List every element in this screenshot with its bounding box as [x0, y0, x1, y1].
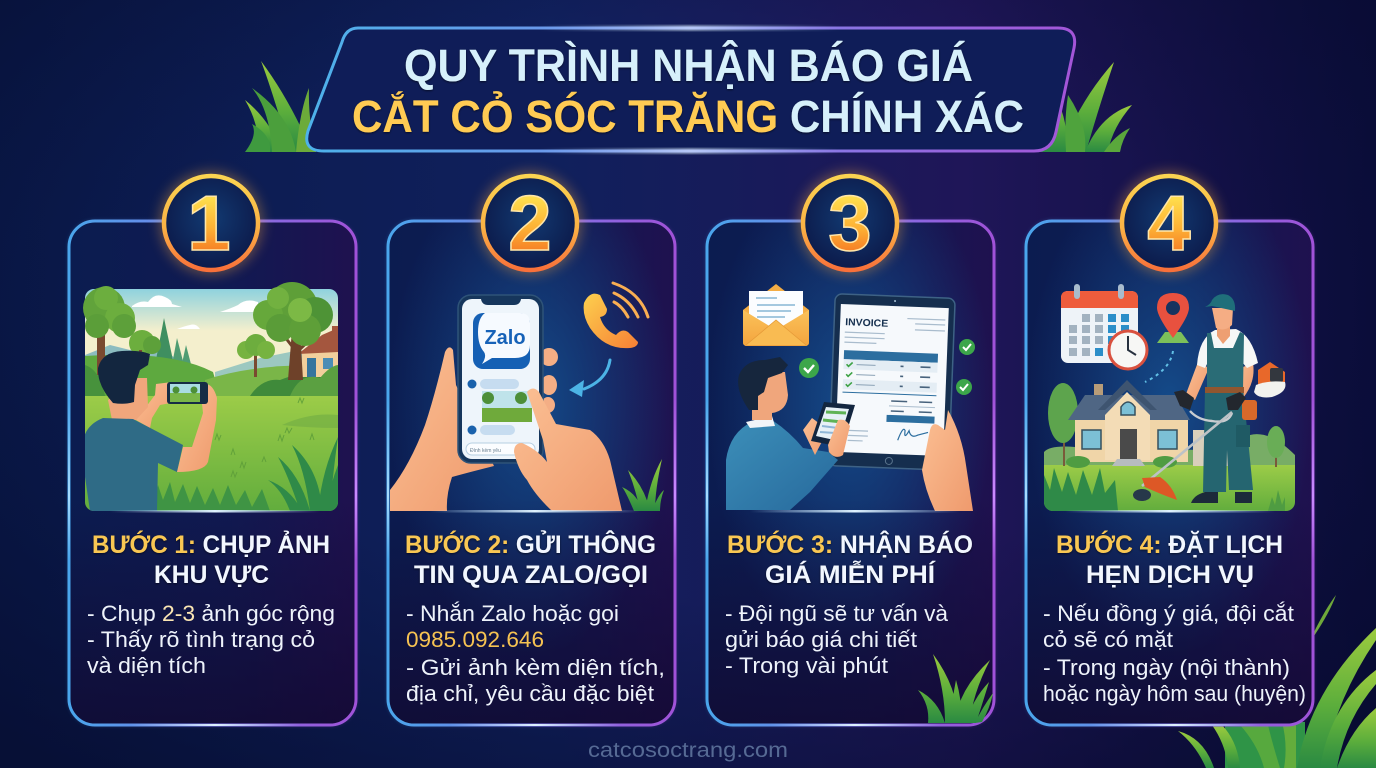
illustration: phone with Zalo [390, 283, 664, 511]
right hand [514, 388, 622, 511]
image glow [1065, 510, 1275, 512]
shaft and handles [1190, 411, 1232, 422]
lawn and house [1044, 380, 1295, 511]
heading 2: BƯỚC 2: GỬI THÔNG [405, 529, 656, 559]
number badge 4: 4 [1147, 179, 1191, 267]
number badge 3 [798, 171, 902, 275]
trimmer head [1142, 477, 1177, 500]
dotted path [1145, 351, 1173, 382]
website footer: catcosoctrang.com [588, 739, 788, 762]
body 3: - Trong vài phút [725, 653, 888, 678]
card frame [387, 221, 676, 726]
illustration: worker with trimmer [1044, 284, 1295, 511]
person [84, 351, 217, 511]
body 2: - Nhắn Zalo hoặc gọi [406, 601, 619, 626]
card 2 [387, 171, 676, 726]
call icon [584, 294, 638, 348]
legs [1203, 388, 1253, 492]
body 1 [87, 601, 335, 678]
house [302, 352, 338, 377]
heading 1: BƯỚC 1: CHỤP ẢNH [92, 529, 330, 559]
grass tuft card corner [918, 654, 993, 723]
number badge 1 [159, 171, 263, 275]
body 3 [725, 601, 949, 678]
hands and small phone [803, 418, 828, 455]
number badge 2: 2 [508, 179, 552, 267]
shirt [1197, 329, 1258, 368]
signal waves [613, 283, 648, 317]
body 4 [1043, 601, 1306, 706]
image glow [750, 510, 960, 512]
heading 1 [92, 529, 330, 589]
left hand [390, 347, 494, 511]
heading 1: KHU VỰC [154, 561, 269, 589]
body 1: - Thấy rõ tình trạng cỏ [87, 627, 315, 652]
body 3: - Đội ngũ sẽ tư vấn và [725, 601, 949, 626]
heading 3 [727, 529, 973, 589]
envelope [743, 284, 809, 346]
number badge 4 [1117, 171, 1221, 275]
number badge 3: 3 [828, 179, 872, 267]
card frame [68, 221, 357, 726]
calendar [1061, 284, 1138, 363]
arrow [584, 360, 610, 389]
overall bib [1207, 332, 1244, 390]
grass: title left [245, 61, 316, 152]
heading 2: TIN QUA ZALO/GỌI [414, 561, 648, 589]
phone [458, 295, 543, 463]
body 2 [406, 601, 665, 706]
middle tree [254, 350, 257, 377]
body 2: 0985.092.646 [406, 627, 544, 652]
Zalo icon [473, 313, 530, 369]
illustration: invoice tablet [726, 284, 975, 511]
card 4 [1025, 171, 1314, 726]
heading 4: BƯỚC 4: ĐẶT LỊCH [1056, 529, 1283, 559]
illustration: man photographing lawn [83, 282, 338, 511]
card 3 [706, 171, 995, 726]
body 4: - Trong ngày (nội thành) [1043, 655, 1290, 680]
number badge 1: 1 [187, 179, 231, 267]
heading 4 [1056, 529, 1283, 589]
map pin [1157, 293, 1189, 343]
grass: title right [1040, 62, 1132, 152]
clock [1109, 331, 1147, 369]
card frame [1025, 221, 1314, 726]
head [1217, 322, 1230, 344]
check marks [799, 339, 975, 395]
body 1: và diện tích [87, 653, 206, 678]
cloud [132, 295, 182, 307]
tablet [829, 294, 955, 470]
person [726, 420, 838, 510]
grass tuft in photo [268, 437, 338, 511]
title line two: CẮT CỎ SÓC TRĂNG CHÍNH XÁC [352, 91, 1024, 142]
heading 2 [405, 529, 656, 589]
title line one: QUY TRÌNH NHẬN BÁO GIÁ [404, 40, 973, 91]
tablet: INVOICE [845, 317, 889, 330]
body 4: - Nếu đồng ý giá, đội cắt [1043, 601, 1294, 626]
illustration: phone with Zalo: Đính kèm yêu [470, 448, 501, 454]
chat rows [468, 380, 476, 388]
trimmer motor [1258, 362, 1285, 392]
right tree [288, 330, 303, 380]
grass: bottom right corner [1178, 595, 1376, 768]
fingers behind phone [540, 348, 558, 366]
title panel [307, 28, 1075, 151]
hand holding tablet [922, 410, 973, 511]
gloves [1174, 390, 1194, 410]
heading 3: GIÁ MIỄN PHÍ [765, 559, 936, 589]
body 3: gửi báo giá chi tiết [725, 627, 917, 652]
worker [1133, 294, 1285, 503]
title glow top [540, 26, 840, 30]
body 4: hoặc ngày hôm sau (huyện) [1043, 681, 1306, 706]
title glow bottom [540, 149, 840, 153]
image glow [110, 510, 320, 512]
title banner [245, 26, 1132, 153]
card 1 [68, 171, 357, 726]
body 2: - Gửi ảnh kèm diện tích, [406, 655, 665, 680]
pouch [1242, 400, 1257, 420]
heading 4: HẸN DỊCH VỤ [1086, 561, 1254, 589]
body 4: cỏ sẽ có mặt [1043, 627, 1173, 652]
heading 3: BƯỚC 3: NHẬN BÁO [727, 529, 973, 559]
number badge 2 [478, 171, 582, 275]
card frame [706, 221, 995, 726]
arms [1186, 362, 1209, 400]
body 1: - Chụp 2-3 ảnh góc rộng [87, 601, 335, 626]
illustration: phone with Zalo: Zalo [484, 327, 526, 349]
image glow [430, 510, 640, 512]
left tree [97, 325, 105, 375]
grass tuft [622, 459, 664, 511]
body 2: địa chỉ, yêu cầu đặc biệt [406, 681, 654, 706]
